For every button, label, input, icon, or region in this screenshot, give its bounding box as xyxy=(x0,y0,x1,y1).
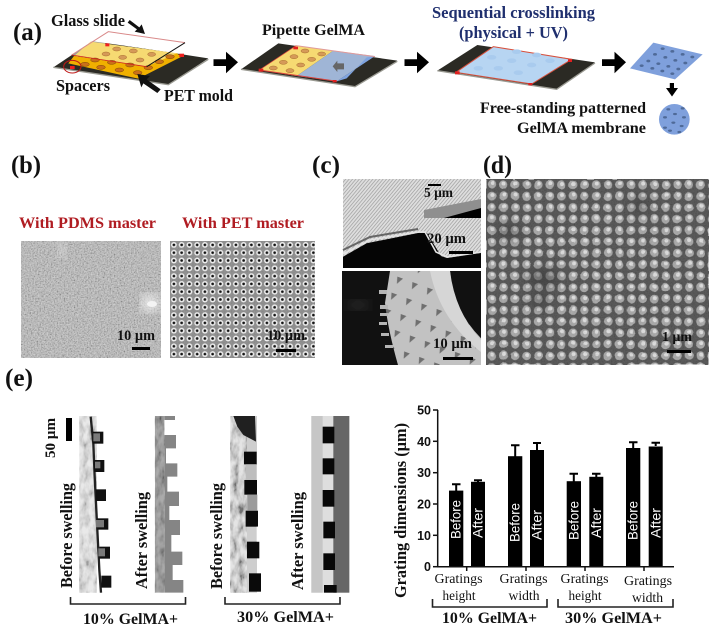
y tick labels: 30 xyxy=(417,466,431,480)
x axis xyxy=(437,567,674,571)
scale label: 10 µm xyxy=(267,328,305,344)
arrow: step 3 to membrane xyxy=(602,52,626,73)
x group labels: Gratings xyxy=(560,572,608,587)
diagram: step 1 device with glass slide and PET mold xyxy=(53,20,208,93)
bracket: 30% images xyxy=(225,597,340,604)
heading: panel a: (a) xyxy=(13,19,42,46)
image: 10% after swelling xyxy=(155,416,183,593)
heading: panel b: (b) xyxy=(11,152,41,179)
bar labels: Before xyxy=(626,501,641,540)
x group labels: Gratings xyxy=(434,572,482,587)
label: chart 10% GelMA+: 10% GelMA+ xyxy=(442,610,537,627)
diagram: step 3 sequential crosslinking xyxy=(437,45,595,89)
image: pillar array SEM xyxy=(486,179,709,365)
x group labels xyxy=(434,572,672,606)
label: Spacers: Spacers xyxy=(56,76,111,95)
y tick labels xyxy=(417,404,431,574)
label: 10% GelMA+: 10% GelMA+ xyxy=(83,611,178,628)
bracket: 10% images xyxy=(70,597,186,604)
bracket: 10% chart group xyxy=(432,599,547,607)
label: GelMA membrane: GelMA membrane xyxy=(517,120,646,137)
icon: square patterned membrane xyxy=(630,43,703,79)
bar chart: grating dimensions xyxy=(391,404,674,627)
label: After swelling, 10%: After swelling xyxy=(132,491,151,589)
heading: panel c: (c) xyxy=(312,152,340,179)
label: chart 30% GelMA+: 30% GelMA+ xyxy=(565,610,662,627)
image: PET master SEM xyxy=(170,241,315,358)
y tick labels: 40 xyxy=(417,435,431,449)
scale label: 10 µm xyxy=(433,336,472,352)
arrow: step 2 to 3 xyxy=(404,52,429,73)
icon: circular patterned membrane xyxy=(659,104,690,135)
heading: panel e: (e) xyxy=(5,365,33,392)
scale bar xyxy=(667,350,691,353)
y tick labels: 10 xyxy=(417,529,431,543)
scale label: 20 µm xyxy=(427,231,466,247)
x group labels: Gratings xyxy=(500,572,548,587)
panel: (b) replica masters xyxy=(11,152,315,358)
panel: (e) swelling of gratings xyxy=(5,365,674,628)
x group labels: width xyxy=(632,591,663,606)
diagram: step 2 pipette GelMA xyxy=(241,43,397,87)
inset xyxy=(424,179,481,218)
image: 30% after swelling xyxy=(311,416,349,593)
label: 30% GelMA+: 30% GelMA+ xyxy=(237,609,334,626)
x group labels: height xyxy=(442,589,476,604)
label: Before swelling, 30%: Before swelling xyxy=(207,482,226,589)
y axis title: Grating dimensions (µm) xyxy=(391,423,410,598)
bracket: 30% chart group xyxy=(558,599,673,607)
heading: panel d: (d) xyxy=(483,152,512,179)
scale label: 1 µm xyxy=(662,330,692,345)
image: bottom SEM of curved membrane xyxy=(342,271,481,365)
arrow: step 1 to 2 xyxy=(214,52,238,73)
panel: (d) high magnification SEM xyxy=(483,152,709,365)
label: Free-standing patterned: Free-standing patterned xyxy=(480,100,646,117)
bar labels: Before xyxy=(508,503,523,542)
scale label: 10 µm xyxy=(117,328,155,344)
scale bar xyxy=(276,349,296,352)
scale bar xyxy=(443,357,473,360)
bar labels: After xyxy=(471,507,486,538)
scale label: 50 µm: 50 µm xyxy=(43,417,59,458)
image: top SEM with inset xyxy=(343,179,481,268)
inset scale label: 5 µm xyxy=(424,185,454,200)
panel: (a) fabrication workflow xyxy=(13,3,703,137)
x group labels: Gratings xyxy=(624,574,672,589)
y tick labels: 0 xyxy=(424,560,431,574)
y tick labels: 50 xyxy=(417,404,431,418)
bars xyxy=(449,446,663,567)
label: Pipette GelMA: Pipette GelMA xyxy=(262,22,365,39)
bar labels: After xyxy=(648,507,663,538)
error bars xyxy=(452,442,660,491)
image: 30% before swelling xyxy=(230,416,261,593)
bar labels: After xyxy=(589,507,604,538)
inset scale bar xyxy=(428,184,441,186)
y tick labels: 20 xyxy=(417,498,431,512)
image: PDMS master SEM xyxy=(21,241,161,358)
panel: (c) membrane SEM cross-sections xyxy=(312,152,481,365)
arrow: membrane to punched disc xyxy=(666,83,678,96)
bar labels: Before xyxy=(566,501,582,540)
label: With PDMS master: With PDMS master xyxy=(19,215,156,232)
label: After swelling, 30%: After swelling xyxy=(288,491,307,590)
label: With PET master: With PET master xyxy=(182,215,304,232)
label: physical + UV: (physical + UV) xyxy=(459,23,568,42)
image: 10% before swelling xyxy=(79,416,111,593)
scale bar xyxy=(132,347,150,350)
x group labels: height xyxy=(568,589,602,604)
label: Before swelling, 10%: Before swelling xyxy=(57,482,76,588)
label: Sequential crosslinking: Sequential crosslinking xyxy=(432,3,596,22)
bar labels: After xyxy=(530,509,545,540)
scale bar xyxy=(449,251,473,254)
scale bar: 50 µm xyxy=(66,418,72,441)
bar labels xyxy=(449,500,663,542)
x group labels: width xyxy=(508,589,540,604)
bar labels: Before xyxy=(449,500,464,539)
label: Glass slide: Glass slide xyxy=(51,11,125,30)
label: PET mold: PET mold xyxy=(164,86,233,105)
y axis xyxy=(433,410,438,567)
